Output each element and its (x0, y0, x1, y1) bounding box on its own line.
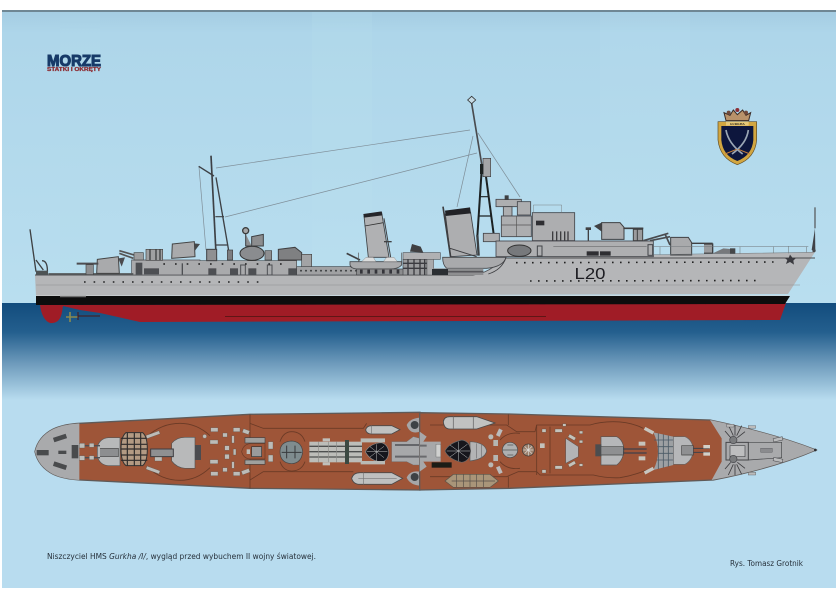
pom-pom platform (280, 441, 303, 464)
badge: ship crest: GURKHA (730, 122, 745, 126)
stern quarterdeck (35, 423, 79, 480)
after funnel top view (361, 438, 389, 464)
gun Y superfiring (172, 242, 195, 258)
aft deck outline (35, 412, 420, 490)
forward funnel top view (445, 440, 487, 462)
deckhouse doors and windows (136, 263, 297, 275)
aft deckhouse (132, 260, 297, 275)
deck plan: forward half (420, 413, 817, 490)
bridge wing (566, 438, 578, 463)
hull: waterline and plating lines (35, 258, 815, 316)
crane and ammunition boxes (119, 251, 140, 258)
credit: illustrator: Rys. Tomasz Grotnik (730, 559, 803, 568)
forecastle grey (710, 420, 816, 480)
deck plan: aft half (35, 412, 420, 490)
forward superstructure (403, 96, 816, 275)
gun X platform (97, 438, 120, 466)
midship grey deck (407, 418, 420, 486)
gun X aft (97, 257, 119, 273)
ship plan: top view (35, 412, 817, 490)
boat deck (350, 262, 402, 269)
midship deck fittings (297, 267, 360, 275)
bow badge (785, 255, 796, 265)
searchlight platform (240, 246, 264, 260)
bridge fittings (542, 424, 583, 473)
gun B platform (601, 437, 624, 465)
forecastle fittings (725, 424, 783, 475)
forward grating (644, 427, 673, 474)
foremast (472, 103, 494, 256)
centre deckhouse (242, 438, 265, 464)
forward boat deck (443, 257, 506, 268)
gun A platform (673, 437, 693, 464)
hull: grey topsides (35, 252, 815, 296)
logo: Morze: STATKI I OKRĘTY (47, 67, 102, 73)
background: lower panel (2, 400, 836, 588)
badge: ship crest (718, 108, 757, 165)
bridge top view (488, 428, 545, 474)
hull: lower red (40, 303, 786, 323)
upper boat (443, 417, 495, 429)
grating (121, 433, 147, 466)
forward deck outline (420, 413, 816, 490)
bridge structure (483, 199, 575, 242)
ship boats aft (352, 426, 403, 484)
gun Y platform (172, 437, 195, 468)
mast base lockers (207, 249, 217, 261)
rigging wires (199, 130, 520, 250)
gun B (602, 223, 624, 239)
after funnel (364, 213, 389, 257)
torpedo tubes (309, 438, 362, 465)
propeller and rudder (66, 312, 100, 322)
background: sea gradient (2, 303, 836, 400)
forward funnel (445, 213, 477, 257)
forecastle rail (653, 246, 813, 255)
jackstaff (813, 207, 817, 228)
pom-pom gun (410, 244, 423, 253)
gun A with crane (671, 237, 692, 255)
aft superstructure (30, 156, 423, 275)
lower boat (445, 474, 498, 487)
pom-pom block continuation (403, 253, 440, 275)
forward deckhouse (496, 241, 653, 257)
background: sky (2, 10, 836, 303)
portholes (84, 262, 775, 282)
deck frame lines (430, 414, 647, 488)
ensign staff (30, 229, 47, 273)
AA gun (278, 247, 302, 260)
hull: black boot topping (36, 296, 790, 305)
pennant number: L20 (574, 266, 606, 283)
deck fittings (79, 428, 273, 476)
ship profile: side view (30, 96, 816, 323)
midship grey (420, 432, 441, 472)
main mast (199, 156, 230, 260)
caption: ship description: Niszczyciel HMS Gurkha /I/, wygląd przed wybuchem II wojny światowej. (47, 551, 316, 561)
deck frame lines (147, 414, 367, 488)
logo: Morze: MORZE (47, 53, 101, 70)
